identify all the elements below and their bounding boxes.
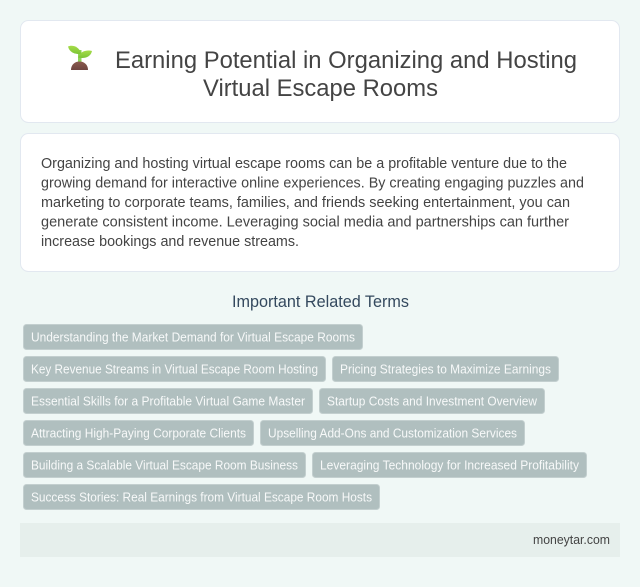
title: Earning Potential in Organizing and Hosting xyxy=(115,47,577,74)
footer source text: moneytar.com xyxy=(533,533,610,547)
text block: intro paragraph: growing demand for interactive online experiences. By creating engaging puzzles and xyxy=(41,174,584,192)
tag list: Upselling Add-Ons and Customization Services xyxy=(268,426,517,440)
text block: intro paragraph: marketing to corporate teams, families, and friends seeking entertainment, you can xyxy=(41,194,570,211)
tag list xyxy=(24,324,586,510)
tag list: Startup Costs and Investment Overview xyxy=(327,394,538,408)
tag list: Attracting High-Paying Corporate Clients xyxy=(31,426,246,440)
title: Virtual Escape Rooms xyxy=(203,75,438,102)
icon: seedling xyxy=(68,46,92,70)
tag list: Pricing Strategies to Maximize Earnings xyxy=(340,362,551,376)
text block: intro paragraph: generate consistent income. Leveraging social media and partnerships can further xyxy=(41,214,569,230)
panel: intro text xyxy=(20,134,620,272)
heading: related terms: Important Related Terms xyxy=(232,292,409,311)
tag list: Building a Scalable Virtual Escape Room Business xyxy=(31,458,298,472)
title xyxy=(115,47,577,102)
tag list: Understanding the Market Demand for Virtual Escape Rooms xyxy=(31,330,355,344)
text block: intro paragraph xyxy=(41,155,584,250)
footer xyxy=(20,523,620,557)
text block: intro paragraph: increase bookings and revenue streams. xyxy=(41,233,299,250)
text block: intro paragraph: Organizing and hosting virtual escape rooms can be a profitable venture due to the xyxy=(41,155,567,172)
tag list: Key Revenue Streams in Virtual Escape Room Hosting xyxy=(31,362,318,376)
tag list: Essential Skills for a Profitable Virtual Game Master xyxy=(31,394,306,408)
panel: title card xyxy=(20,20,620,122)
tag list: Leveraging Technology for Increased Profitability xyxy=(320,458,579,472)
tag list: Success Stories: Real Earnings from Virtual Escape Room Hosts xyxy=(31,490,372,504)
